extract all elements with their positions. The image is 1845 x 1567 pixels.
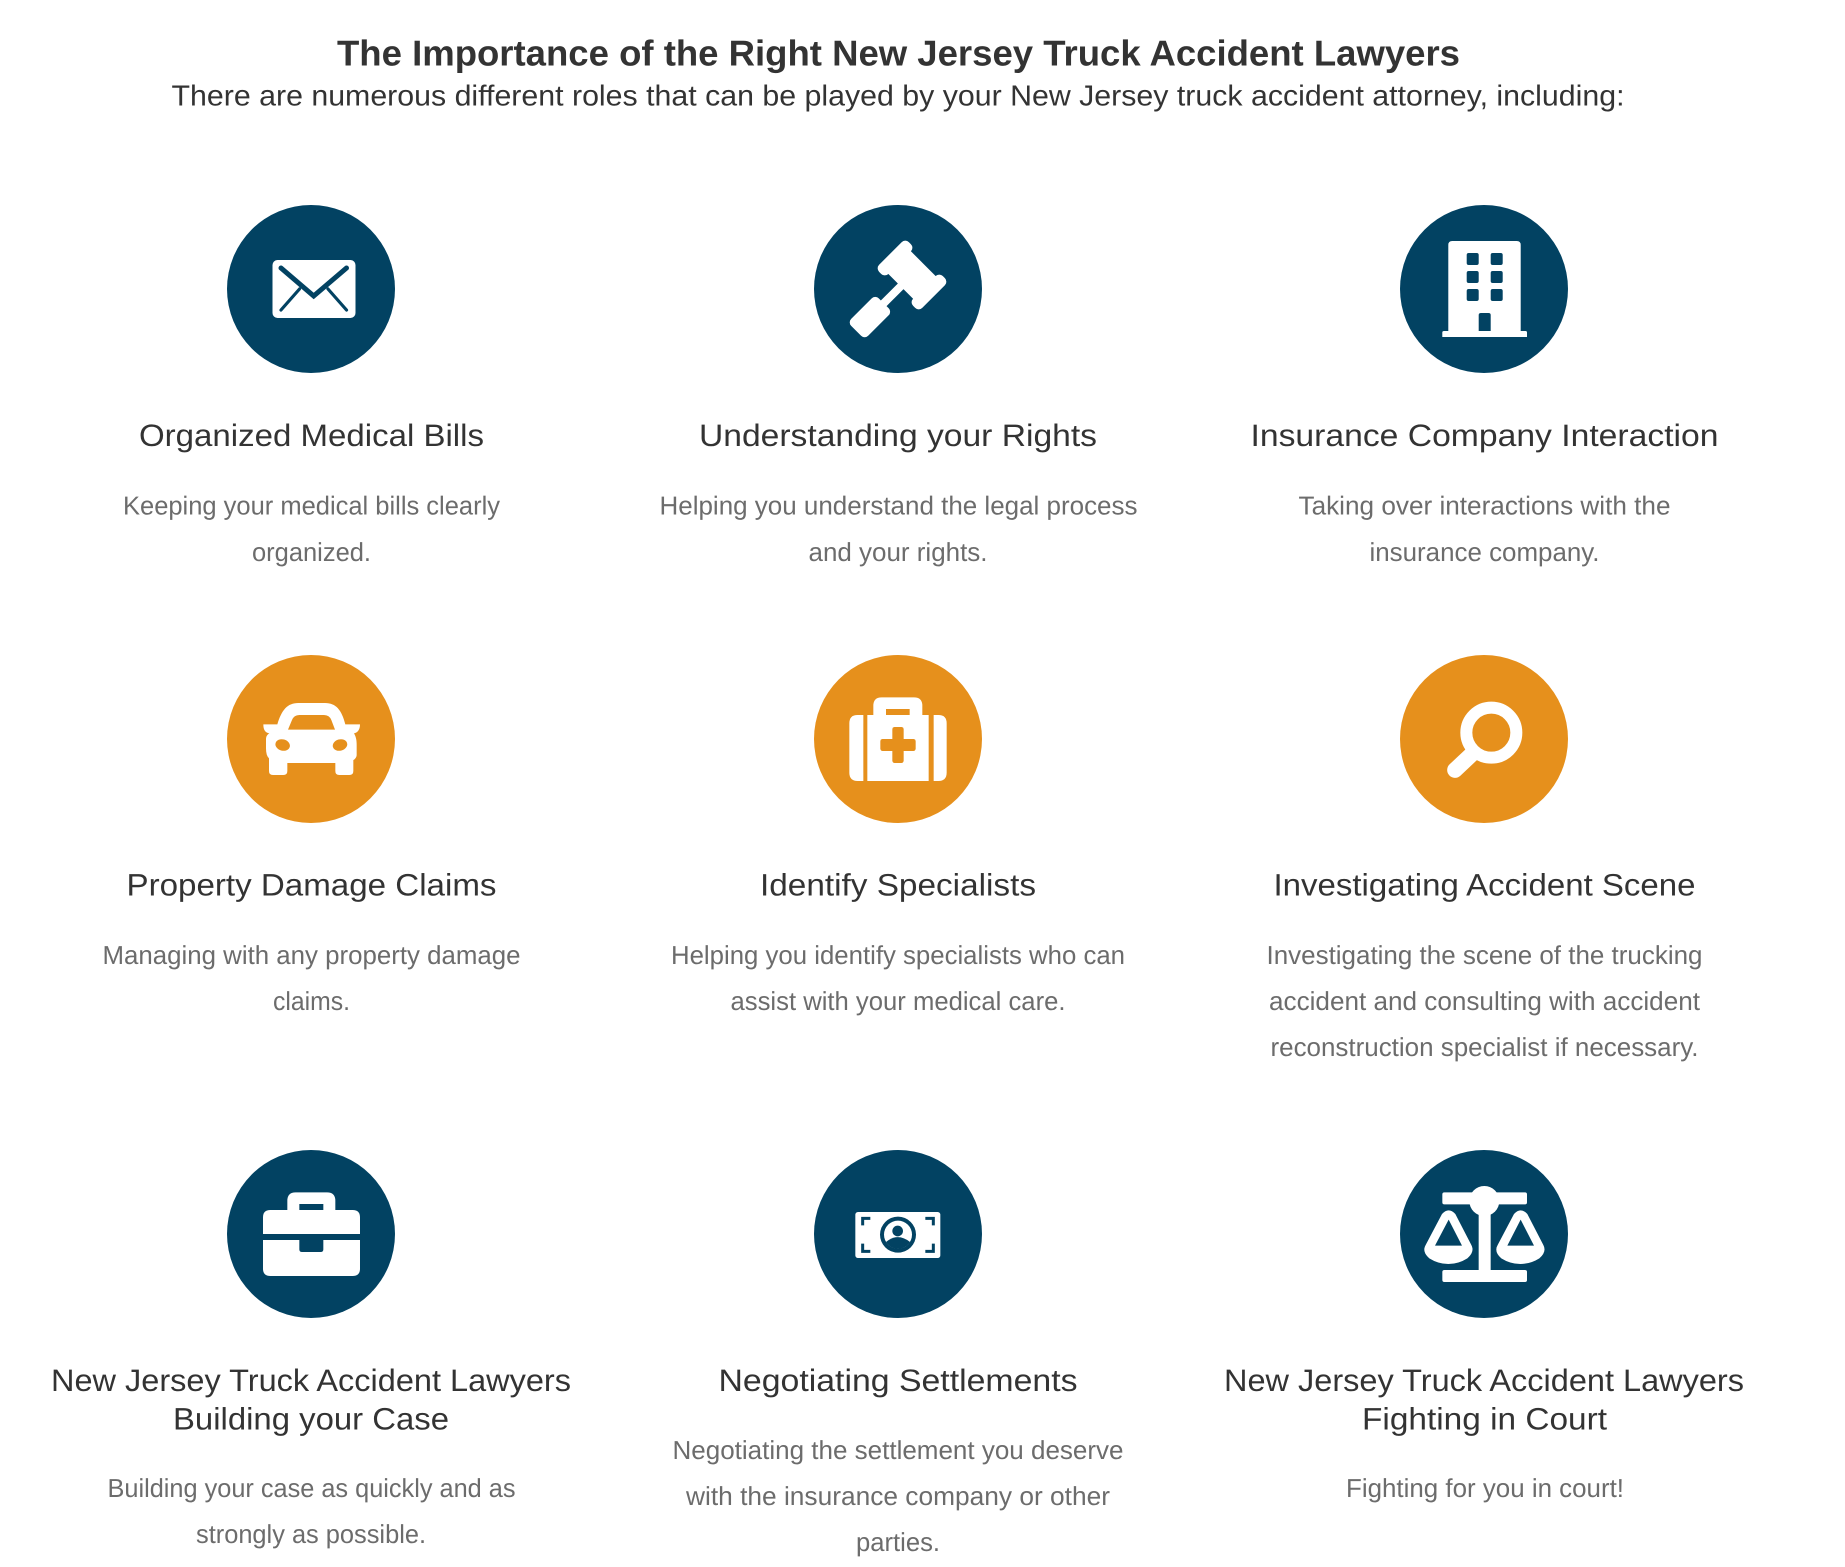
description [1266,940,1702,1062]
icon: scales of justice [1400,1150,1568,1318]
panel: investigating accident scene [1266,655,1702,1062]
subtitle: There are numerous different roles that can be played by your New Jersey truck accident attorney, including: [172,80,1624,112]
heading: Fighting in Court [1362,1402,1607,1436]
description [123,490,500,567]
description [672,1435,1124,1557]
description: with the insurance company or other [685,1481,1110,1511]
icon: magnifying glass [1400,655,1568,823]
description: strongly as possible. [196,1519,426,1549]
description: organized. [252,537,371,567]
icon: office building [1400,205,1568,373]
panel: fighting in court [1224,1150,1744,1503]
icon: medical kit [814,655,982,823]
panel: organized medical bills [123,205,500,567]
description [102,940,520,1016]
description: accident and consulting with accident [1269,986,1701,1016]
description: insurance company. [1370,537,1600,567]
description: Negotiating the settlement you deserve [672,1435,1124,1465]
description [660,490,1138,567]
panel: identify specialists [671,655,1125,1016]
icon: car [227,655,395,823]
heading: Property Damage Claims [126,868,497,902]
description: Helping you identify specialists who can [671,940,1125,970]
heading: Negotiating Settlements [718,1363,1078,1398]
icon: briefcase [227,1150,395,1318]
heading: Building your Case [173,1402,449,1436]
description: claims. [273,986,350,1016]
description [671,940,1125,1016]
heading: New Jersey Truck Accident Lawyers [51,1363,571,1398]
description: Managing with any property damage [102,940,520,970]
description: Fighting for you in court! [1346,1473,1624,1503]
description: and your rights. [808,537,988,567]
description: Investigating the scene of the trucking [1266,940,1702,970]
description [108,1473,516,1549]
description: Building your case as quickly and as [108,1473,516,1503]
heading: Identify Specialists [760,868,1036,902]
description: assist with your medical care. [730,986,1066,1016]
heading [51,1363,571,1436]
heading: Investigating Accident Scene [1274,868,1696,902]
description: parties. [856,1527,940,1557]
icon: envelope [227,205,395,373]
panel: property damage claims [102,655,520,1016]
heading: Understanding your Rights [699,418,1097,453]
description: Taking over interactions with the [1298,490,1670,520]
heading: New Jersey Truck Accident Lawyers [1224,1363,1744,1398]
description [1298,490,1670,567]
icon: gavel [814,205,982,373]
heading [1224,1363,1744,1436]
panel: insurance company interaction [1250,205,1718,567]
title: The Importance of the Right New Jersey Truck Accident Lawyers [337,32,1460,74]
panel: building your case [51,1150,571,1549]
description: Keeping your medical bills clearly [123,490,500,520]
icon: banknote [814,1150,982,1318]
description: Helping you understand the legal process [660,490,1138,520]
heading: Insurance Company Interaction [1250,418,1718,453]
description: reconstruction specialist if necessary. [1270,1032,1698,1062]
panel: understanding your rights [660,205,1138,567]
panel: negotiating settlements [672,1150,1124,1557]
heading: Organized Medical Bills [139,418,484,453]
